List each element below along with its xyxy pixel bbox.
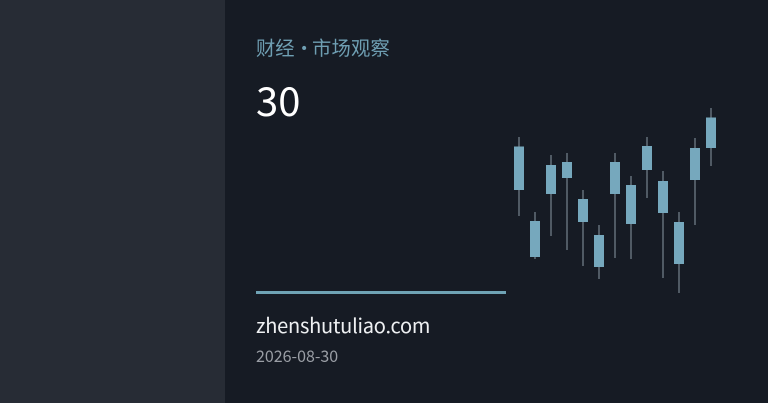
date: 2026-08-30 [256,343,338,367]
divider line [256,291,506,294]
heading: category: · [294,33,314,61]
site name: zhenshutuliao.com [256,310,430,339]
heading: category: 市场观察 [312,33,390,61]
title: number: 30 [256,70,300,128]
panel: left sidebar [0,0,225,403]
heading: category: 财经 [256,33,295,61]
heading: category [256,33,390,61]
